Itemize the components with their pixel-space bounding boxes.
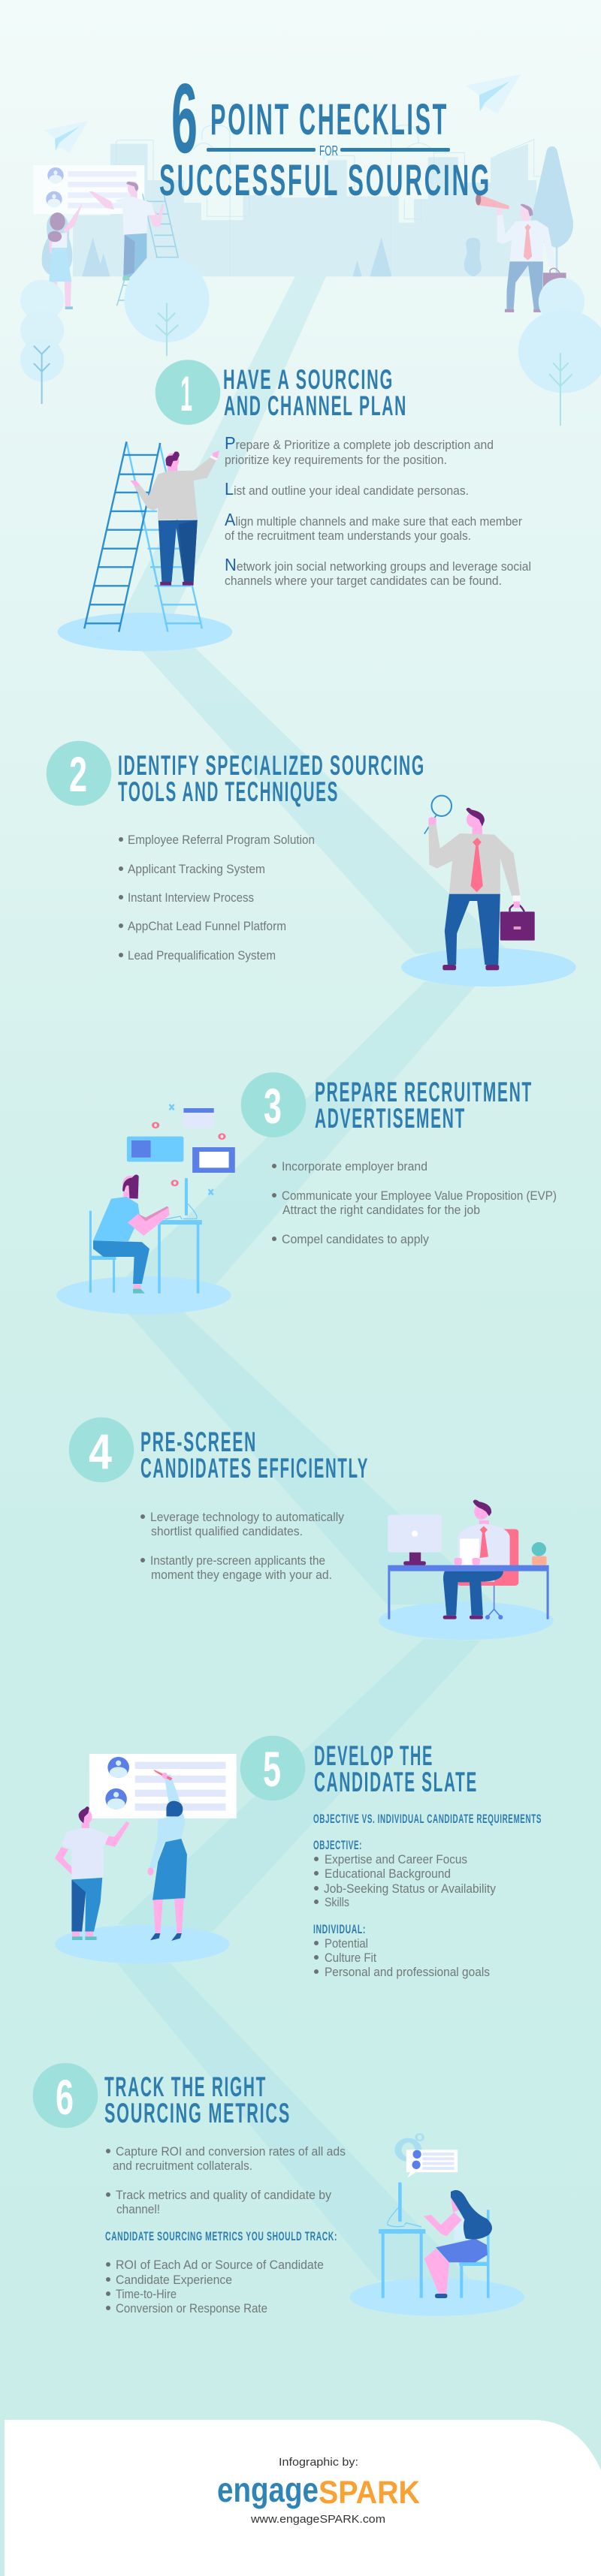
section 1 text: of the recruitment team understands your goals.: [225, 529, 471, 543]
section 6 text: Candidate Experience: [116, 2273, 232, 2287]
section 2 header: [47, 741, 425, 807]
section 1 illustration: man on ladder: [58, 441, 232, 651]
section 5 requirements text: INDIVIDUAL:: [313, 1923, 366, 1936]
section 2 bullet list: Applicant Tracking System: [128, 863, 265, 876]
section 3 bullet list: Communicate your Employee Value Proposition (EVP): [282, 1189, 557, 1203]
section 5 requirements text: Expertise and Career Focus: [325, 1853, 467, 1866]
section 5 requirements text: Job-Seeking Status or Availability: [324, 1882, 497, 1896]
title: 6: [171, 63, 198, 173]
candidate board: [33, 165, 144, 214]
foreground tree right: [518, 278, 601, 426]
foreground tree left: [20, 280, 64, 404]
section 2 header: TOOLS AND TECHNIQUES: [118, 776, 339, 807]
section 5 header: CANDIDATE SLATE: [314, 1767, 478, 1797]
section 5 header: 5: [263, 1741, 281, 1797]
section 5 requirements text: [313, 1812, 542, 1979]
title: FOR: [319, 143, 338, 158]
section 1 header: HAVE A SOURCING: [223, 364, 394, 395]
section 2: specialized tools: [47, 741, 576, 987]
engageSPARK logo: SPARK: [319, 2475, 420, 2511]
section 6 header: 6: [56, 2069, 74, 2125]
section 4 header: CANDIDATES EFFICIENTLY: [140, 1453, 369, 1484]
section 1: sourcing and channel plan: [58, 360, 531, 651]
section 2 bullet list: AppChat Lead Funnel Platform: [128, 920, 286, 933]
credit label: Infographic by:: [279, 2456, 358, 2469]
section 4 header: 4: [89, 1424, 112, 1479]
section 4 bullet list: Leverage technology to automatically: [150, 1511, 345, 1524]
section 2 bullet list: Instant Interview Process: [128, 891, 254, 905]
man on ladder: [89, 182, 164, 281]
city skyline: [73, 125, 552, 276]
section 6 text: Capture ROI and conversion rates of all ads: [116, 2145, 346, 2159]
section 5 requirements text: Potential: [325, 1937, 368, 1951]
section 4 bullet list: shortlist qualified candidates.: [151, 1525, 303, 1538]
engageSPARK logo: engage: [217, 2470, 319, 2509]
hero scene illustration: [20, 74, 601, 426]
section 1 text: Network join social networking groups and leverage social: [225, 555, 531, 574]
section 2 header: 2: [69, 746, 87, 802]
section 6 text: CANDIDATE SOURCING METRICS YOU SHOULD TRACK:: [105, 2230, 337, 2243]
section 6 header: TRACK THE RIGHT: [104, 2071, 267, 2102]
section 6 text: Time-to-Hire: [116, 2288, 177, 2301]
section 2 bullet list: [119, 833, 315, 963]
section 1 header: 1: [180, 366, 192, 421]
engageSPARK logo: [217, 2470, 420, 2511]
section 6 header: SOURCING METRICS: [104, 2098, 291, 2129]
section 6 text: Track metrics and quality of candidate by: [116, 2189, 332, 2202]
section 1 header: AND CHANNEL PLAN: [224, 390, 407, 421]
section 5 requirements text: OBJECTIVE:: [313, 1839, 362, 1852]
section 1 text: channels where your target candidates can be found.: [225, 574, 502, 588]
section 3 bullet list: Compel candidates to apply: [282, 1233, 430, 1246]
section 6: sourcing metrics: [33, 2063, 524, 2316]
section 4 bullet list: Instantly pre-screen applicants the: [150, 1554, 325, 1568]
section 3: recruitment advertisement: [56, 1072, 557, 1315]
section 3 bullet list: [272, 1160, 557, 1246]
section 2 bullet list: Employee Referral Program Solution: [128, 833, 315, 847]
section 1 header: [156, 360, 407, 425]
section 3 header: [241, 1072, 533, 1137]
section 4 header: PRE-SCREEN: [140, 1427, 257, 1457]
website: www.engageSPARK.com: [250, 2513, 385, 2526]
section 6 text: channel!: [116, 2203, 160, 2216]
section 6 text: [105, 2145, 346, 2315]
section 2 illustration: man with magnifier: [401, 796, 576, 987]
section 4 bullet list: moment they engage with your ad.: [151, 1568, 332, 1582]
section 6 text: Conversion or Response Rate: [116, 2302, 267, 2315]
pale ladder: [117, 194, 178, 306]
section 4 illustration: man at desk: [379, 1499, 554, 1640]
footer panel: [5, 2420, 601, 2576]
background trees: [42, 146, 573, 276]
man with megaphone: [476, 194, 566, 312]
section 6 text: ROI of Each Ad or Source of Candidate: [116, 2258, 324, 2272]
section 5 illustration: two people at board: [55, 1754, 237, 1963]
section 2 bullet list: Lead Prequalification System: [128, 949, 276, 963]
section 6 header: [33, 2063, 291, 2129]
section 3 bullet list: Attract the right candidates for the job: [282, 1204, 480, 1217]
section 5 requirements text: Culture Fit: [325, 1951, 376, 1965]
section 1 text: prioritize key requirements for the position.: [225, 453, 447, 467]
woman: [48, 203, 83, 309]
section 5 requirements text: Educational Background: [325, 1867, 451, 1881]
section 3 bullet list: Incorporate employer brand: [282, 1160, 427, 1174]
paper plane right: [466, 74, 521, 114]
section 5 requirements text: Skills: [325, 1896, 349, 1909]
section 6 illustration: woman at computer: [349, 2134, 524, 2316]
section 1 text: Prepare & Prioritize a complete job description and: [225, 433, 494, 453]
section 3 header: 3: [264, 1078, 282, 1134]
section 4 header: [69, 1418, 369, 1484]
section 6 text: and recruitment collaterals.: [113, 2159, 252, 2173]
section 1 text: Align multiple channels and make sure that each member: [225, 510, 522, 529]
section 1 text: [225, 433, 531, 588]
section 5 requirements text: Personal and professional goals: [325, 1966, 490, 1979]
winding path connecting the sections: [113, 276, 506, 2280]
foreground tree centre: [124, 258, 210, 356]
paper plane left: [44, 121, 88, 152]
title: [159, 63, 491, 205]
section 5 header: DEVELOP THE: [314, 1740, 433, 1771]
section 5 header: [240, 1736, 478, 1800]
section 4: pre-screen candidates: [69, 1418, 554, 1640]
section 3 illustration: man at computer with floating windows: [56, 1104, 235, 1315]
section 5: candidate slate: [55, 1736, 542, 1979]
section 3 header: ADVERTISEMENT: [315, 1103, 466, 1134]
section 4 bullet list: [140, 1511, 345, 1582]
section 1 text: List and outline your ideal candidate personas.: [225, 479, 469, 499]
